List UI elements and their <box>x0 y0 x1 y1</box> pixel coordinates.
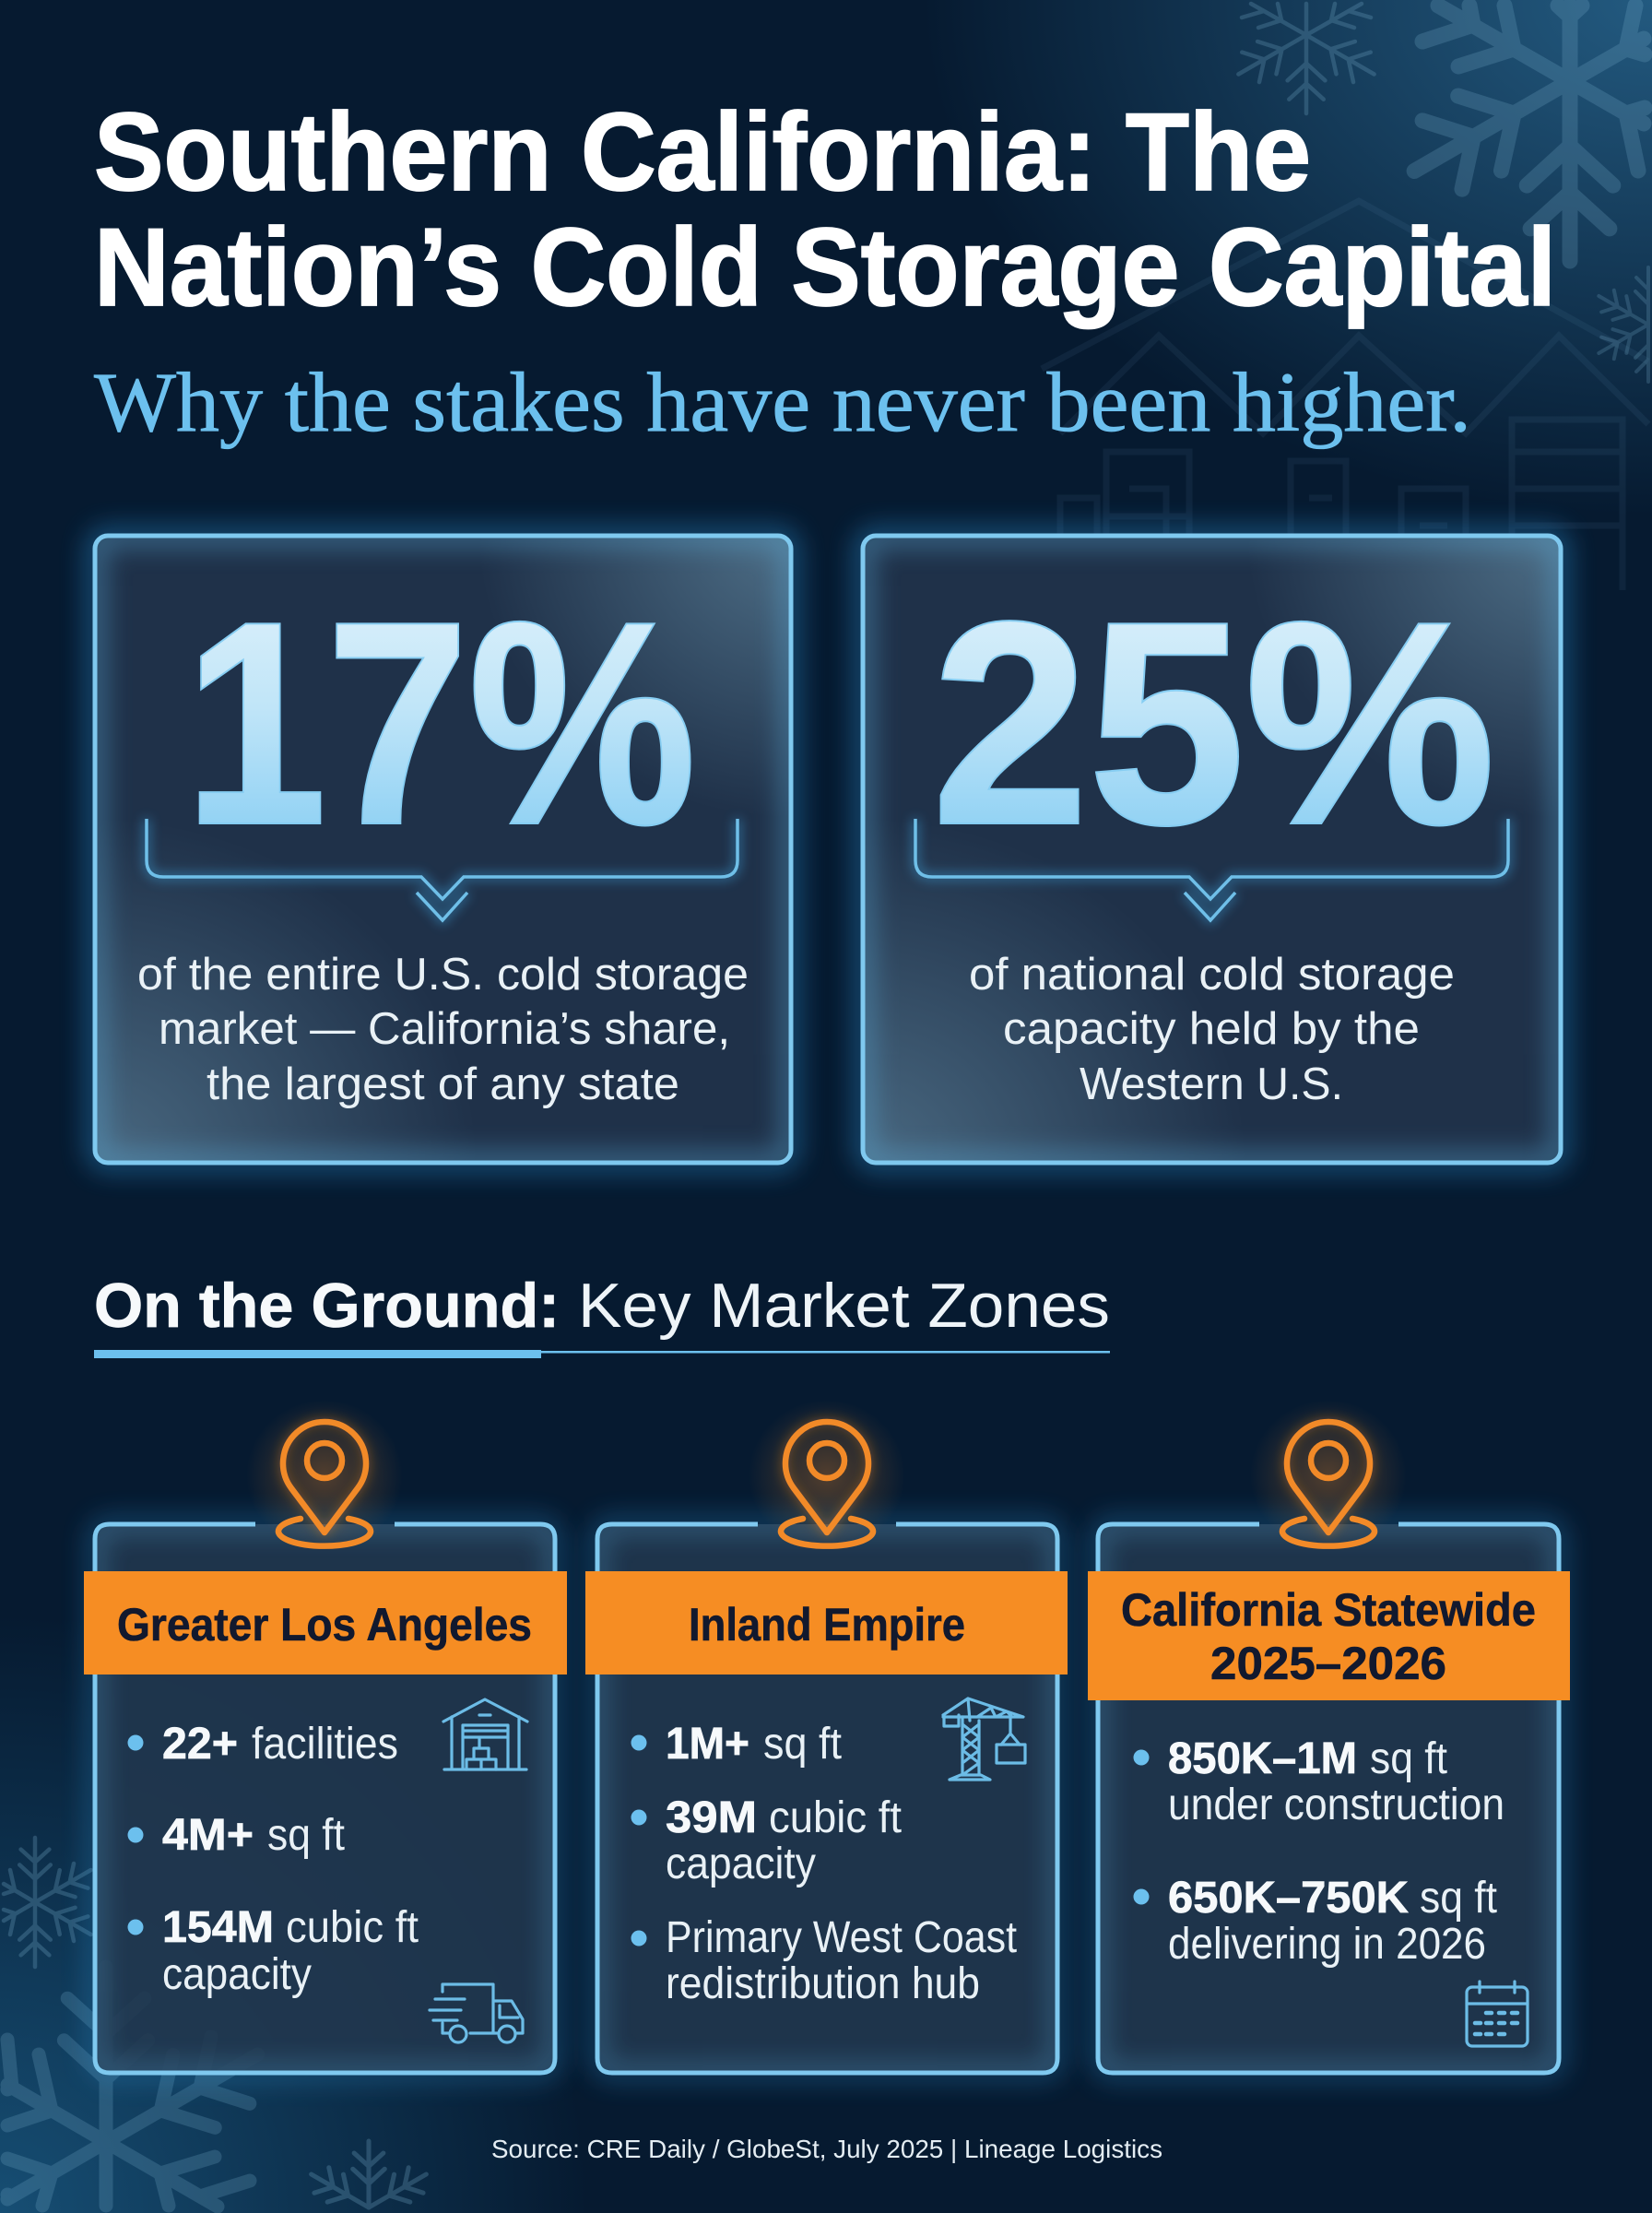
icon: map pin <box>1250 1400 1407 1551</box>
subtitle: Why the stakes have never been higher. <box>94 355 1471 449</box>
panel: California Statewide 2025–2026 <box>1088 1400 1570 2073</box>
description <box>137 950 749 1109</box>
icon: calendar <box>1467 1982 1528 2046</box>
section heading <box>94 1271 1110 1358</box>
bracket with chevrons <box>147 819 738 920</box>
source footer: Source: CRE Daily / GlobeSt, July 2025 | Lineage Logistics <box>491 2135 1162 2163</box>
bullet list: under construction <box>1168 1781 1504 1829</box>
icon: map pin <box>246 1400 403 1551</box>
title <box>94 90 1556 329</box>
bullet list: 850K–1M <box>1168 1734 1357 1783</box>
panel: 25% stat <box>863 536 1561 1163</box>
background warehouse outlines <box>1042 201 1648 590</box>
section heading: On the Ground: <box>94 1271 560 1341</box>
panel: 17% stat <box>95 536 791 1163</box>
zone banner: 2025–2026 <box>1210 1638 1446 1689</box>
bullet list: Primary West Coast <box>666 1913 1017 1962</box>
bullet list: 154M <box>162 1903 274 1952</box>
bullet list <box>631 1720 1017 2008</box>
description <box>969 950 1455 1109</box>
title: Nation’s Cold Storage Capital <box>94 206 1556 329</box>
zone banner: Inland Empire <box>689 1599 965 1651</box>
description: capacity held by the <box>1003 1004 1420 1054</box>
zone banner <box>1088 1571 1570 1700</box>
panel: Greater Los Angeles <box>84 1400 567 2073</box>
bullet list: capacity <box>666 1840 816 1888</box>
section heading: Key Market Zones <box>578 1271 1110 1341</box>
background snowflake: right edge <box>1592 267 1652 382</box>
title: Southern California: The <box>94 90 1311 214</box>
bullet list: delivering in 2026 <box>1168 1920 1486 1969</box>
description: Western U.S. <box>1080 1059 1343 1109</box>
icon: crane <box>943 1698 1025 1780</box>
bullet list: sq ft <box>1420 1874 1497 1923</box>
bullet list: 22+ <box>162 1720 238 1769</box>
icon: warehouse <box>443 1699 527 1769</box>
bullet list: cubic ft <box>769 1793 902 1842</box>
bullet list: sq ft <box>1370 1734 1447 1783</box>
bullet list <box>1134 1734 1504 1969</box>
bullet list: cubic ft <box>286 1903 419 1952</box>
background snowflake: small left <box>4 1838 99 1967</box>
description: of national cold storage <box>969 950 1455 1000</box>
background snowflake: small bottom <box>303 2141 434 2213</box>
panel: Inland Empire <box>585 1400 1068 2073</box>
bullet list: sq ft <box>267 1811 345 1860</box>
bullet list <box>127 1720 419 1999</box>
background snowflake: small top <box>1229 4 1384 113</box>
big number 25%: 25% <box>932 563 1495 884</box>
icon: delivery truck <box>430 1984 523 2042</box>
icon: map pin <box>749 1400 905 1551</box>
background snowflake: large top right <box>1393 6 1645 261</box>
bullet list: 650K–750K <box>1168 1874 1409 1923</box>
zone banner <box>84 1571 567 1675</box>
zone banner: California Statewide <box>1121 1584 1536 1636</box>
bullet list: redistribution hub <box>666 1959 980 2008</box>
bullet list: sq ft <box>763 1720 842 1769</box>
zone banner: Greater Los Angeles <box>117 1599 532 1651</box>
background snowflake: large bottom left <box>7 1967 278 2207</box>
description: of the entire U.S. cold storage <box>137 950 749 1000</box>
bullet list: 4M+ <box>162 1811 254 1860</box>
description: market — California’s share, <box>159 1004 730 1054</box>
bullet list: capacity <box>162 1950 312 1999</box>
description: the largest of any state <box>206 1059 679 1109</box>
bullet list: 1M+ <box>666 1720 749 1769</box>
bullet list: facilities <box>252 1720 398 1769</box>
bullet list: 39M <box>666 1793 757 1842</box>
zone banner <box>585 1571 1068 1675</box>
bracket with chevrons <box>915 819 1508 920</box>
big number 17%: 17% <box>184 563 696 884</box>
